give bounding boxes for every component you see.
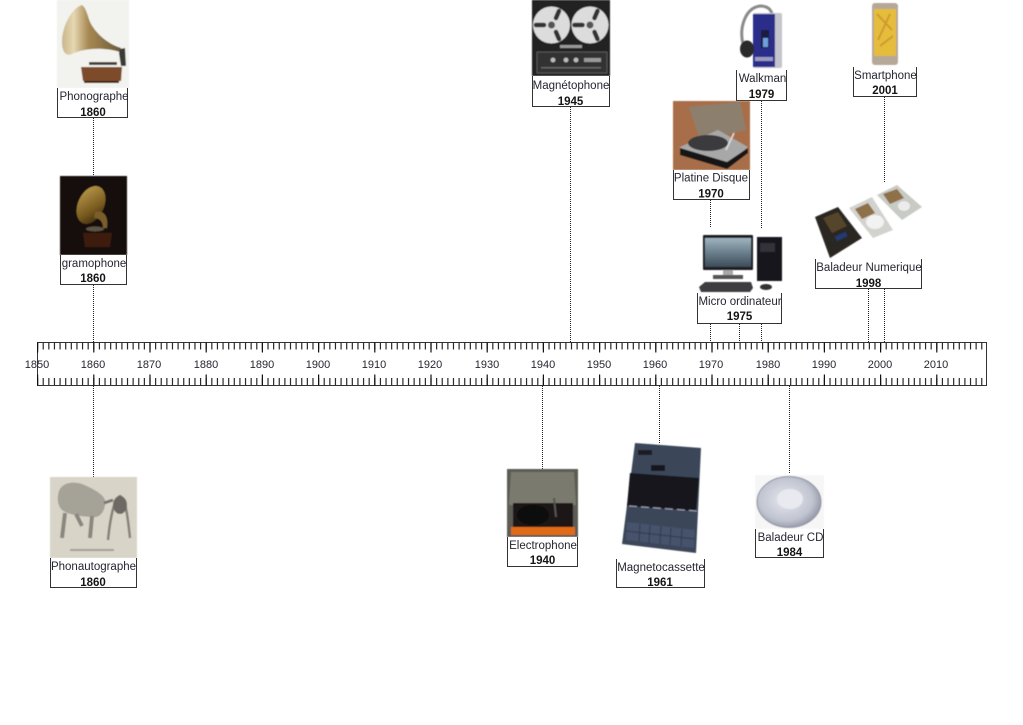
label: 1984	[777, 547, 803, 559]
label: Baladeur CD	[758, 532, 823, 544]
label: Magnétophone	[533, 80, 609, 92]
label	[853, 67, 917, 97]
label: 1998	[856, 278, 882, 290]
label: Platine Disque	[674, 172, 748, 184]
label: 1860	[80, 577, 106, 589]
label: Micro ordinateur	[698, 296, 782, 308]
connectors: dotted lines from events to the axis	[94, 97, 884, 477]
icon: record player with clear lid	[507, 469, 578, 537]
label	[736, 70, 787, 101]
axis year labels: 1950	[587, 359, 611, 371]
icon: cassette recorder	[622, 443, 701, 553]
event: Smartphone 2001	[853, 3, 917, 97]
label: Electrophone	[509, 540, 577, 552]
axis year labels: 1860	[81, 359, 105, 371]
label	[57, 88, 129, 119]
label: Magnetocassette	[617, 562, 705, 574]
axis year labels: 1890	[250, 359, 274, 371]
icon: turntable	[673, 101, 750, 170]
axis year labels: 1960	[643, 359, 667, 371]
event: Micro ordinateur 1975	[697, 235, 782, 324]
axis year labels	[25, 359, 948, 371]
label: Smartphone	[854, 70, 917, 82]
label: 1970	[698, 188, 724, 200]
axis year labels: 1880	[194, 359, 218, 371]
icon: desktop computer	[699, 235, 782, 292]
label: 1860	[80, 273, 106, 285]
label	[50, 558, 136, 589]
axis year labels: 1870	[137, 359, 161, 371]
event: Magnétophone 1945	[532, 0, 610, 108]
label: 1945	[558, 96, 584, 108]
event: Walkman 1979	[736, 6, 787, 101]
axis year labels: 1920	[418, 359, 442, 371]
label	[507, 537, 578, 567]
axis year labels: 1940	[531, 359, 555, 371]
icon: gramophone	[60, 176, 127, 255]
label	[697, 293, 782, 324]
axis year labels: 1900	[306, 359, 330, 371]
label: 1860	[80, 107, 106, 119]
label: 1975	[727, 311, 753, 323]
label: 1979	[749, 89, 774, 101]
label	[673, 170, 750, 200]
axis year labels: 1930	[475, 359, 499, 371]
event: gramophone 1860	[60, 176, 127, 285]
icon: phonograph	[57, 0, 129, 88]
label	[755, 529, 824, 559]
event: Electrophone 1940	[507, 469, 578, 567]
timeline axis 1850 to 2019	[25, 342, 987, 386]
event: Baladeur Numerique 1998	[815, 185, 922, 290]
icon: smartphone	[872, 3, 898, 65]
label: 1961	[647, 577, 673, 589]
label: gramophone	[62, 258, 126, 270]
axis year labels: 1850	[25, 359, 49, 371]
icon: three digital music players	[815, 185, 922, 258]
icon: portable CD player	[755, 475, 824, 529]
axis year labels: 2010	[924, 359, 948, 371]
event: Magnetocassette 1961	[616, 443, 705, 589]
label: Phonographe	[59, 91, 129, 103]
axis year labels: 1980	[756, 359, 780, 371]
axis year labels: 1970	[699, 359, 723, 371]
axis year labels: 1910	[362, 359, 386, 371]
event: Phonautographe 1860	[50, 477, 137, 589]
event: Phonographe 1860	[57, 0, 129, 119]
axis year labels: 2000	[868, 359, 892, 371]
label: Phonautographe	[51, 561, 136, 573]
icon: walkman with headphones	[740, 6, 782, 68]
label	[616, 559, 705, 589]
label: Baladeur Numerique	[816, 262, 922, 274]
icon: reel-to-reel tape recorder	[532, 0, 610, 76]
label	[60, 255, 126, 285]
label: 1940	[530, 555, 555, 567]
event: Platine Disque 1970	[673, 101, 750, 200]
label: 2001	[872, 85, 898, 97]
label	[815, 259, 922, 290]
icon: phonautograph engraving	[50, 477, 137, 558]
label: Walkman	[739, 73, 786, 85]
label	[532, 76, 610, 108]
axis year labels: 1990	[812, 359, 836, 371]
event: Baladeur CD 1984	[755, 475, 824, 559]
